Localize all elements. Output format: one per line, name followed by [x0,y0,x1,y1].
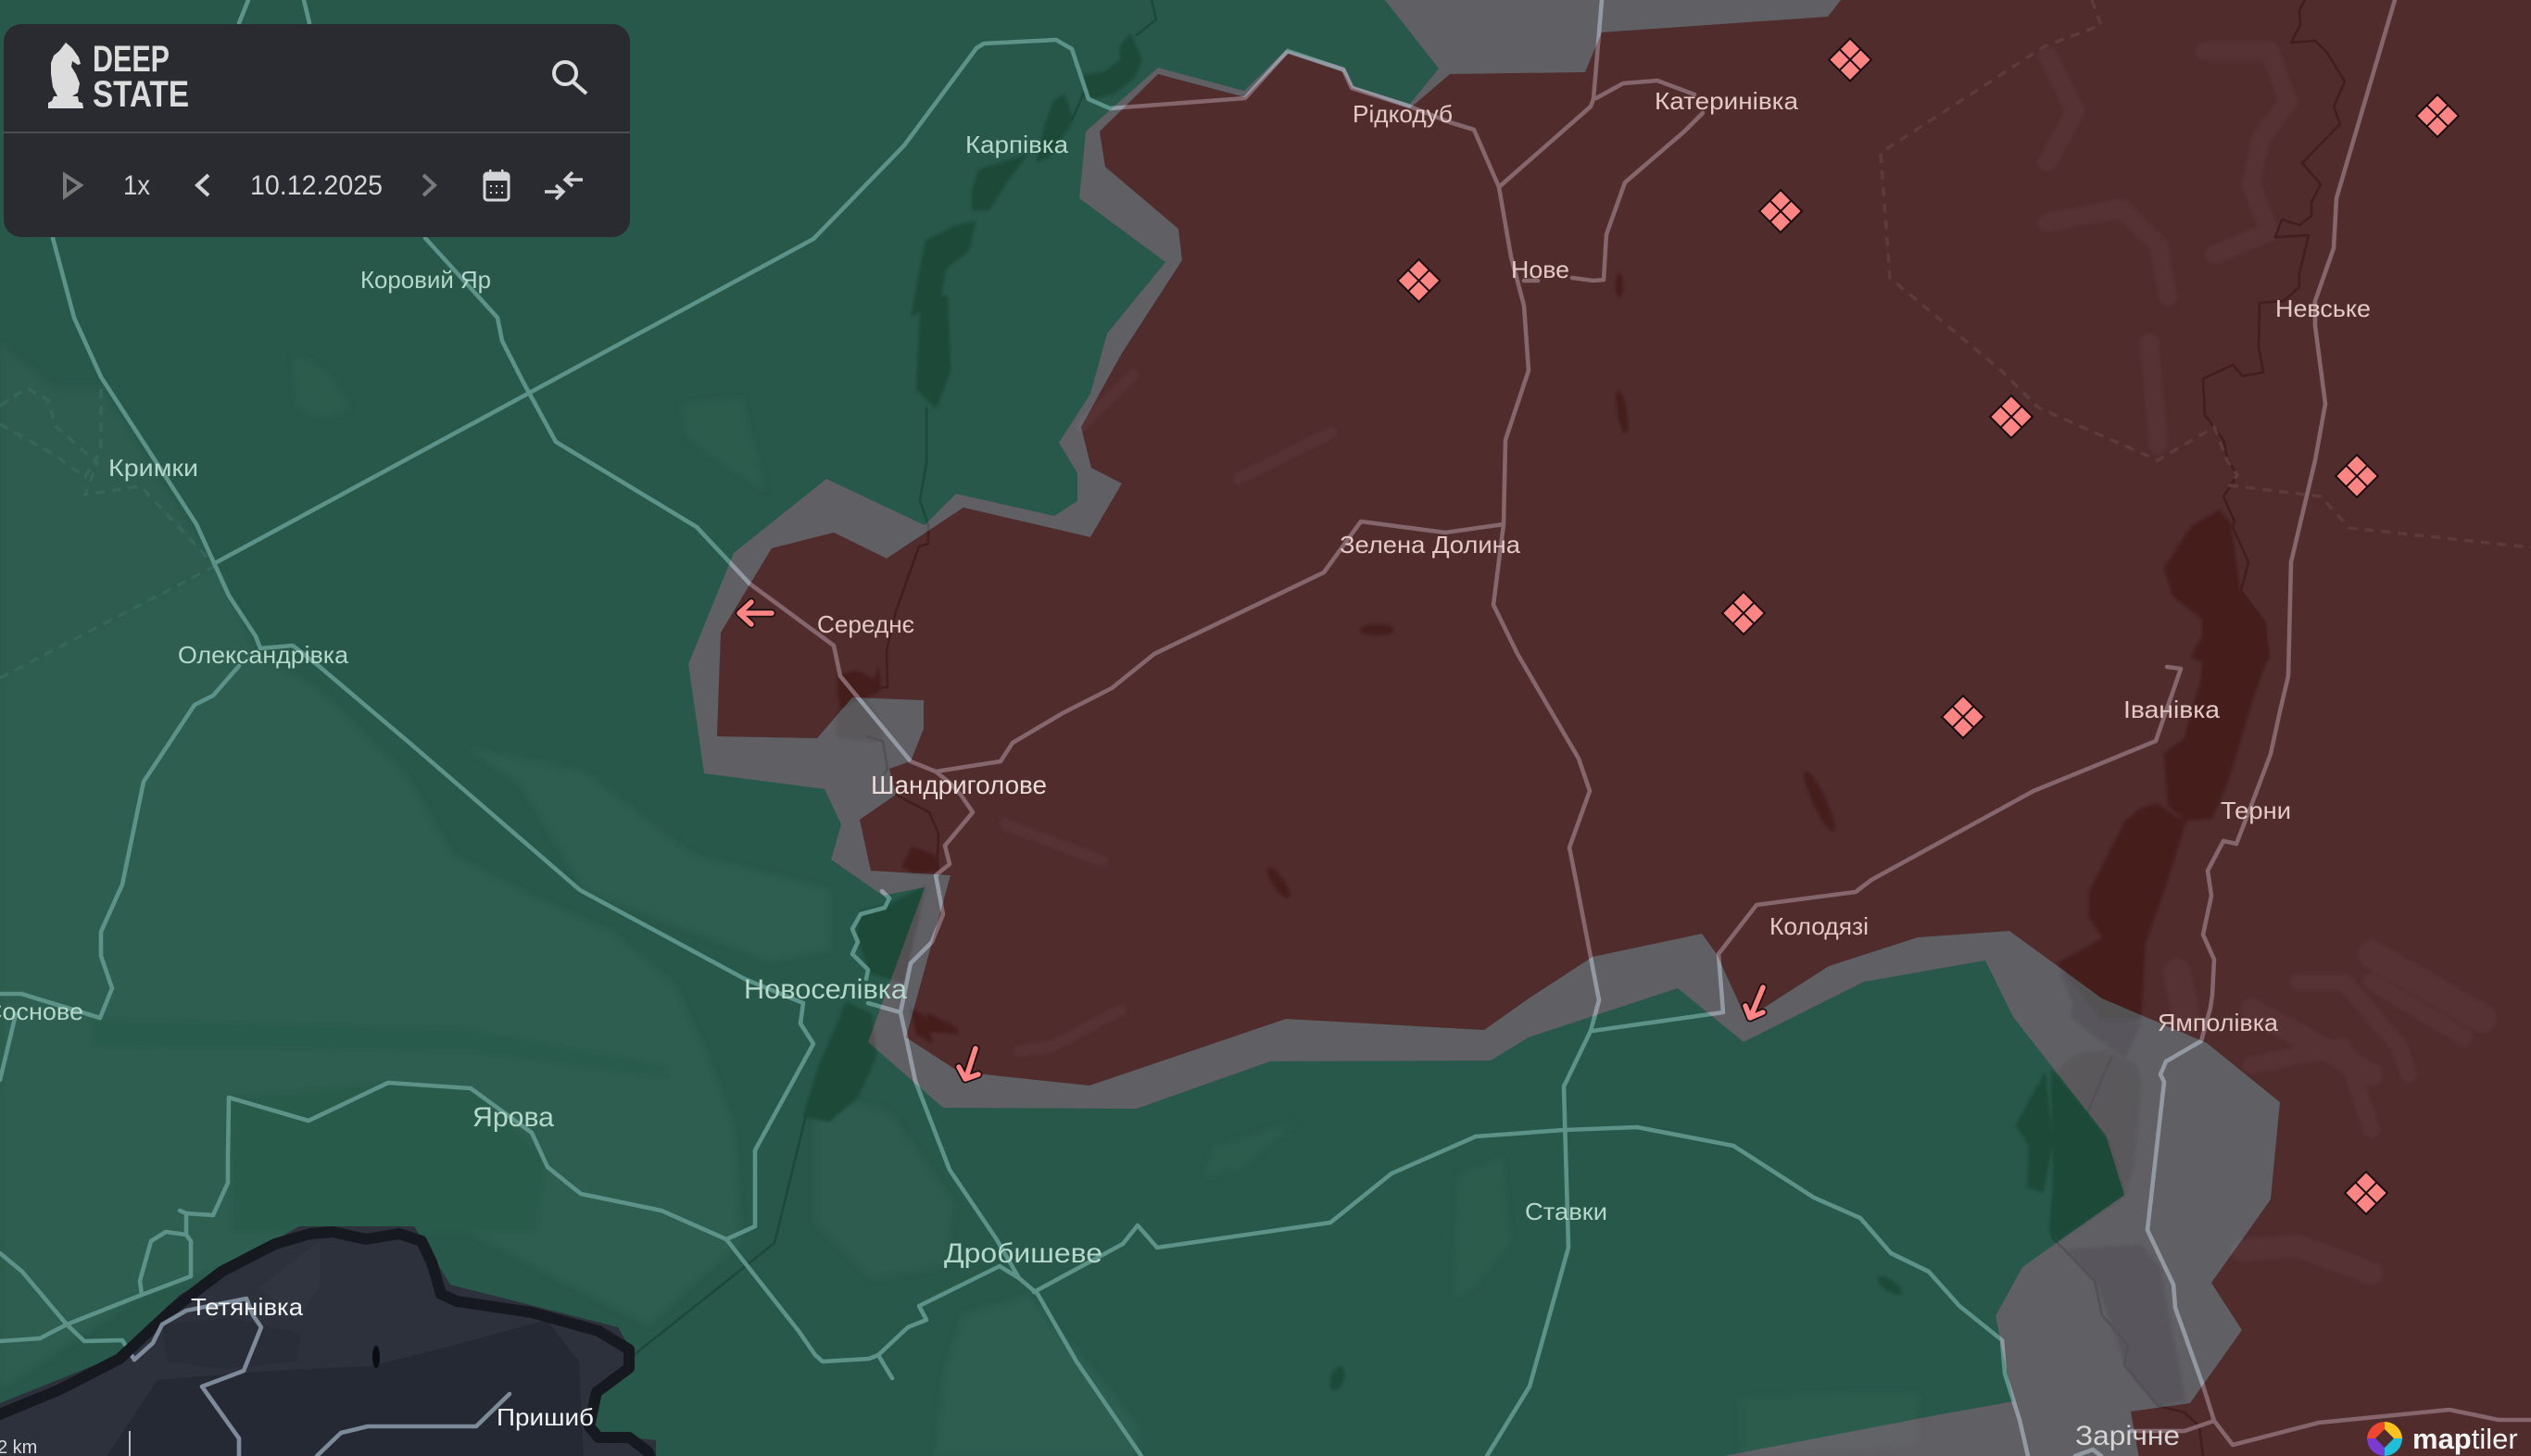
forests and ponds [804,35,2268,1406]
label: Катеринівка [1655,87,1799,115]
icon: next [423,175,434,195]
arrow: south near Новоселівка [959,1048,978,1079]
date: 10.12.2025 [250,170,383,201]
arrow: west near Середнє [739,602,772,624]
label: Терни [2221,797,2291,824]
diamond marker [1722,592,1765,634]
icon: calendar [485,169,509,200]
rivers [634,0,2345,1456]
icon: play [65,175,81,196]
diamond marker [1397,259,1440,302]
arrow: south near Колодязі [1745,987,1763,1018]
roads in dark region [134,1299,510,1456]
diamond marker [1759,190,1802,232]
label: Тетянівка [191,1293,304,1321]
capture markers: pink diamonds [1397,39,2459,1214]
speed: 1x [123,170,150,201]
maptiler logo: maptiler [2412,1423,2518,1455]
logo wordmark [93,39,189,115]
territory: grey contested zone [688,0,2531,1456]
territory: red occupied area [717,0,2531,1456]
top-left control panel [4,24,630,237]
diamond marker [2416,94,2459,137]
label: Дробишеве [944,1238,1102,1269]
icon: compare arrows [545,172,583,199]
label: Рідкодуб [1353,100,1453,128]
diamond marker [1829,39,1871,82]
logo wordmark: DEEP [93,39,170,80]
label: Карпівка [965,131,1069,158]
icon: chess knight logo [48,43,83,108]
label: Олександрівка [178,641,349,669]
label: Ярова [472,1102,554,1133]
dark region: floor [0,1226,656,1456]
label: Середнє [817,610,914,638]
label: Колодязі [1769,912,1869,940]
label: Новоселівка [744,974,907,1005]
label: Коровий Яр [360,266,491,294]
dashed borders [0,0,2531,678]
diamond marker [1990,395,2033,438]
advance arrows [739,602,1763,1079]
label: Зарічне [2075,1421,2180,1451]
icon: search [554,62,586,94]
icon: previous [197,175,208,195]
label: Зелена Долина [1340,531,1521,559]
dark river along border [0,1232,653,1456]
diamond marker [2345,1172,2387,1214]
diamond marker [1942,696,1984,738]
label: Нове [1511,256,1569,283]
label: Іванівка [2123,696,2221,723]
label: Невське [2275,295,2371,322]
diamond marker [2336,455,2378,497]
maptiler logo [2367,1422,2518,1456]
icon: maptiler colored diamond [2367,1422,2402,1456]
label: Кримки [108,454,198,482]
label: Пришиб [497,1403,594,1431]
logo wordmark: STATE [93,74,189,115]
label: Ямполівка [2158,1009,2279,1036]
label: Ставки [1525,1198,1607,1225]
label: Шандриголове [871,771,1047,799]
